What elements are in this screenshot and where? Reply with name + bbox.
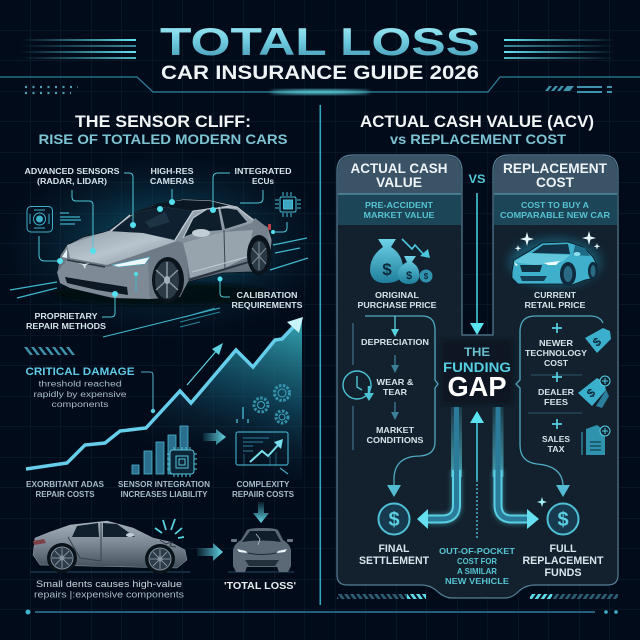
hero car labels: (RADAR, LIDAR) — [37, 177, 107, 186]
icon: money bags — [370, 239, 432, 284]
icon: new blue car — [509, 231, 601, 286]
hero car labels: ADVANCED SENSORS — [24, 167, 120, 176]
hero car labels: ECUs — [252, 177, 275, 186]
replacement funds coin: $ — [557, 509, 569, 531]
callout: critical damage: threshold reached — [38, 380, 122, 388]
front bumper — [57, 260, 150, 299]
column: actual cash value: MARKET VALUE — [364, 211, 435, 220]
funding arrow right — [492, 407, 539, 529]
hero car labels: REPAIR METHODS — [26, 322, 107, 331]
label: out-of-pocket cost: NEW VEHICLE — [445, 577, 510, 586]
hero car labels: REQUIREMENTS — [232, 301, 303, 310]
column: replacement cost: COMPARABLE NEW CAR — [500, 211, 610, 220]
footer rule — [26, 610, 618, 614]
callout: critical damage: CRITICAL DAMAGE — [26, 366, 134, 378]
hero car labels: PROPRIETARY — [34, 312, 98, 321]
label: final settlement — [359, 543, 429, 567]
funding gap label: GAP — [448, 371, 506, 402]
left deduction flow: MARKET — [376, 425, 415, 435]
final settlement coin — [378, 504, 410, 534]
right addition flow: COST — [544, 358, 569, 368]
label: current retail price: RETAIL PRICE — [524, 301, 586, 310]
icon: price tag: $ — [590, 334, 604, 350]
icon: radar sensor — [27, 206, 81, 232]
panel: ACV vs replacement cost — [337, 112, 618, 599]
icon: money bags: $ — [424, 272, 429, 281]
hero car labels: CALIBRATION — [236, 291, 298, 300]
label: final settlement: FINAL — [378, 543, 410, 555]
side panels — [183, 223, 253, 278]
label: full replacement funds: FULL — [550, 543, 577, 555]
right addition flow: TAX — [548, 444, 565, 454]
funding gap label: FUNDING — [443, 359, 511, 375]
label: current retail price — [524, 291, 586, 310]
title: CAR INSURANCE GUIDE 2026 — [161, 63, 479, 84]
arrow — [197, 543, 223, 561]
chart captions: INCREASES LIABILITY — [120, 490, 208, 499]
hero car labels: CAMERAS — [150, 177, 195, 186]
icon: dealer fee tag: $ — [584, 385, 598, 401]
right addition flow: NEWER — [539, 338, 573, 348]
column: actual cash value: ACTUAL CASH — [350, 160, 448, 176]
right heading: ACTUAL CASH VALUE (ACV) — [360, 112, 594, 131]
column: replacement cost: COST — [536, 174, 574, 190]
hazard stripes — [24, 347, 75, 355]
column: replacement cost: REPLACEMENT — [503, 160, 607, 176]
title — [160, 21, 480, 84]
chart captions: EXORBITANT ADAS — [26, 480, 105, 489]
label: original purchase price: PURCHASE PRICE — [358, 301, 437, 310]
icon: dealer fee tag — [578, 376, 610, 408]
hero car labels: INTEGRATED — [234, 167, 292, 176]
label: current retail price: CURRENT — [534, 291, 576, 300]
caption: small dents: Small dents causes high-value — [36, 579, 182, 589]
panel: the sensor cliff — [0, 112, 335, 600]
central arrow down — [470, 193, 484, 335]
central arrow up — [470, 411, 484, 540]
header decoration — [0, 39, 640, 94]
label: full replacement funds: REPLACEMENT — [522, 555, 604, 567]
left heading: RISE OF TOTALED MODERN CARS — [38, 131, 288, 147]
icon: clock — [343, 371, 374, 401]
arrow — [253, 502, 269, 523]
icon: money bags: $ — [406, 270, 412, 282]
vertical divider — [320, 105, 321, 605]
icon: repair cost chart screen — [236, 432, 288, 474]
rear wheel — [247, 235, 271, 275]
chart captions: REPAIR COSTS — [36, 490, 95, 499]
arrow — [203, 429, 226, 445]
left deduction flow: DEPRECIATION — [361, 337, 429, 347]
icon: bars with chip — [132, 426, 197, 477]
comparison frame — [337, 155, 618, 598]
callout leaders — [39, 173, 287, 317]
chart captions — [26, 480, 295, 499]
left deduction flow: TEAR — [383, 387, 407, 397]
icon: money bags: $ — [382, 260, 392, 279]
label: full replacement funds — [522, 543, 604, 579]
column: actual cash value — [338, 156, 461, 225]
label: out-of-pocket cost: OUT-OF-POCKET — [439, 547, 515, 556]
left deduction flow — [353, 316, 438, 497]
column: replacement cost: COST TO BUY A — [521, 201, 589, 210]
roof and windshield — [110, 200, 230, 240]
right heading — [360, 112, 594, 147]
icon: price tag — [585, 328, 611, 353]
VS label: VS — [468, 172, 486, 186]
front wheel — [152, 257, 184, 303]
label: original purchase price: ORIGINAL — [375, 291, 419, 300]
column: actual cash value: PRE-ACCIDENT — [365, 201, 433, 210]
replacement funds coin — [537, 497, 578, 534]
side windows — [183, 207, 222, 237]
right addition flow: TECHNOLOGY — [525, 348, 587, 358]
label: out-of-pocket cost: COST FOR — [457, 557, 497, 566]
right addition flow — [516, 316, 603, 497]
right addition flow: FEES — [544, 397, 568, 407]
front car total loss — [228, 528, 294, 572]
hero car labels: HIGH-RES — [150, 167, 194, 176]
chart: rising repair cost — [26, 317, 303, 480]
label: original purchase price — [358, 291, 437, 310]
label: full replacement funds: FUNDS — [544, 567, 582, 579]
hero car labels — [24, 167, 303, 331]
callout: critical damage — [26, 366, 155, 413]
chart captions: SENSOR INTEGRATION — [118, 480, 210, 489]
caption: small dents — [34, 579, 185, 600]
title: TOTAL LOSS — [160, 21, 480, 64]
icon: sales tax tag — [582, 425, 610, 455]
left heading: THE SENSOR CLIFF: — [75, 112, 251, 131]
left heading — [38, 112, 288, 147]
left deduction flow: CONDITIONS — [366, 435, 424, 445]
left deduction flow: WEAR & — [376, 377, 414, 387]
right heading: vs REPLACEMENT COST — [390, 131, 566, 147]
label: out-of-pocket cost — [439, 547, 515, 586]
callout: critical damage: rapidly by expensive — [34, 390, 127, 399]
side car with dent — [30, 519, 190, 574]
hood — [67, 231, 177, 265]
label: out-of-pocket cost: A SIMILAR — [457, 567, 497, 576]
chart captions: REPAIIR COSTS — [232, 490, 295, 499]
road streaks — [10, 238, 308, 337]
column: replacement cost — [494, 156, 617, 225]
funding gap label — [442, 340, 513, 404]
column: actual cash value: VALUE — [376, 174, 422, 190]
icon: ECU chip — [275, 192, 301, 217]
chart captions: COMPLEXITY — [236, 480, 290, 489]
hazard stripes — [337, 594, 618, 599]
callout: critical damage: components — [52, 400, 108, 409]
hero car — [52, 199, 272, 306]
label: final settlement: SETTLEMENT — [359, 555, 429, 567]
right addition flow: SALES — [542, 434, 570, 444]
caption: total loss: 'TOTAL LOSS' — [224, 581, 296, 592]
final settlement coin: $ — [388, 509, 400, 531]
icon: gears — [237, 386, 290, 423]
caption: small dents: repairs |:expensive components — [34, 590, 185, 600]
funding arrow left — [417, 407, 462, 529]
funding gap label: THE — [464, 345, 490, 359]
right addition flow: DEALER — [538, 387, 574, 397]
